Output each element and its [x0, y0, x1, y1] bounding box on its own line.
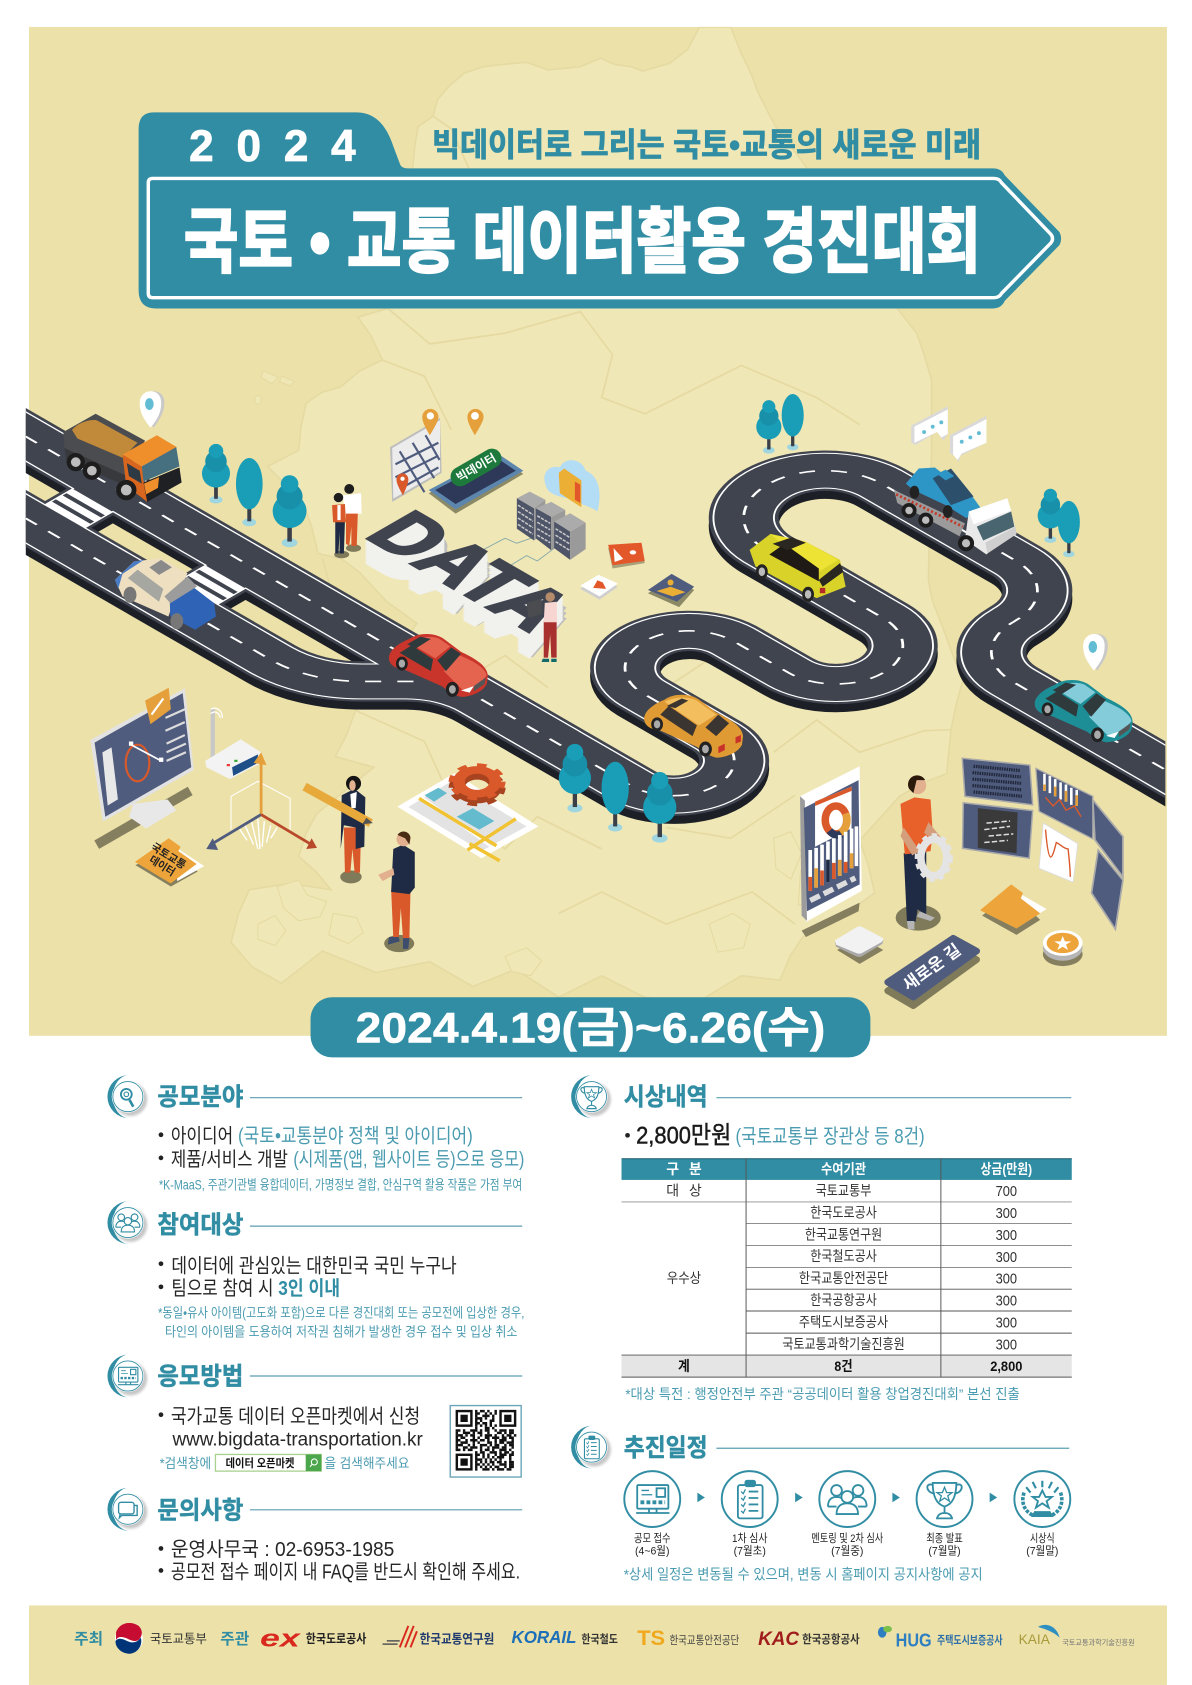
arrow 2: [795, 1493, 803, 1502]
data center connection lines: [480, 537, 554, 566]
icon: magnifier: [107, 1075, 147, 1118]
step 1: [624, 1471, 680, 1557]
prize table: [622, 1158, 1072, 1377]
logo: hug: HUG: [896, 1629, 932, 1650]
prize table: 300: [996, 1227, 1017, 1244]
prize table: 국토교통부: [816, 1183, 872, 1199]
section: awards: [571, 1075, 1072, 1402]
section: schedule: [571, 1426, 1070, 1584]
prize table: 700: [996, 1183, 1017, 1200]
bullet lines: 데이터에 관심있는 대한민국 국민 누구나: [171, 1255, 457, 1277]
step 3: [811, 1471, 884, 1557]
bullet lines: 팀으로 참여 시: [171, 1278, 273, 1300]
heading: 추진일정: [624, 1434, 708, 1462]
prize table: 국토교통과학기술진흥원: [782, 1336, 905, 1352]
trees: top middle group: [756, 394, 804, 454]
host label: 주최: [74, 1630, 103, 1648]
bullet lines: [159, 1539, 520, 1584]
prize table: 상금(만원): [981, 1161, 1032, 1177]
icon: trophy: [571, 1075, 611, 1118]
search hint: [160, 1454, 409, 1471]
flatbed truck with blue car: [894, 467, 1017, 555]
man talking: [378, 831, 415, 952]
prize table: 300: [996, 1314, 1017, 1331]
banner inner outline: [148, 178, 1053, 298]
organizer label: 주관: [220, 1630, 249, 1648]
bullet lines: 3인 이내: [278, 1278, 340, 1300]
prize headline: 2,800만원: [636, 1122, 731, 1149]
bullet lines: 제품/서비스 개발: [171, 1149, 288, 1171]
arrow 1: [697, 1493, 705, 1502]
prize table: 한국도로공사: [810, 1205, 877, 1221]
award note: *대상 특전 : 행정안전부 주관 “공공데이터 활용 창업경진대회” 본선 진출: [625, 1386, 1020, 1402]
step 3: 멘토링 및 2차 심사: [811, 1532, 884, 1545]
city map with gear: [397, 765, 538, 861]
beige and blue SUV: [115, 558, 216, 630]
logo: ts: 한국교통안전공단: [669, 1634, 739, 1647]
icon: monitor: [107, 1355, 147, 1398]
section: participants: [107, 1201, 524, 1339]
road network: [0, 397, 1192, 804]
trees: right group: [1038, 489, 1080, 557]
banner sign shape: [139, 112, 1061, 308]
arrow 4: [990, 1493, 997, 1502]
schedule note: *상세 일정은 변동될 수 있으며, 변동 시 홈페이지 공지사항에 공지: [624, 1567, 983, 1584]
phone with big data label: [429, 445, 523, 514]
media icon tile red: [608, 543, 645, 568]
bullet lines: 공모전 접수 페이지 내 FAQ를 반드시 확인해 주세요.: [171, 1562, 520, 1584]
logo: kac: KAC: [758, 1628, 800, 1650]
prize table: 300: [996, 1336, 1017, 1353]
search hint: 데이터 오픈마켓: [226, 1456, 294, 1470]
logo: kac: [758, 1628, 860, 1650]
subtitle: 빅데이터로 그리는 국토•교통의 새로운 미래: [432, 127, 981, 163]
logo: expressway: [260, 1626, 367, 1652]
wifi router: [205, 708, 261, 779]
trees: left group: [202, 444, 307, 547]
logo: hug: [878, 1626, 1003, 1650]
icon: clipboard: [571, 1426, 611, 1469]
search hint: 을 검색해주세요: [325, 1456, 409, 1471]
logo: korail: KORAIL: [511, 1627, 576, 1647]
note: *K-MaaS, 주관기관별 융합데이터, 가명정보 결합, 안심구역 활용 작품은 가점 부여: [159, 1178, 522, 1193]
logo: ministry emblem: [115, 1623, 143, 1654]
alert icon tile white: [580, 575, 618, 600]
ministry name: 국토교통부: [150, 1632, 207, 1646]
search hint: *검색창에: [160, 1456, 211, 1471]
logo: kac: 한국공항공사: [802, 1632, 860, 1646]
note: 타인의 아이템을 도용하여 저작권 침해가 발생한 경우 접수 및 입상 취소: [165, 1324, 517, 1339]
footer organizers band: [29, 1605, 1167, 1685]
folder with national transport data label: 데이터: [147, 853, 178, 879]
prize table: 300: [996, 1271, 1017, 1288]
logo: ts: TS: [637, 1626, 665, 1650]
arrow 3: [892, 1493, 900, 1502]
step 5: [1014, 1471, 1070, 1557]
logo: kaia: [1019, 1625, 1135, 1647]
icon: chat: [107, 1488, 147, 1531]
step 5: (7월말): [1026, 1543, 1059, 1557]
cloud with folder: [544, 460, 600, 512]
prize table: 한국교통안전공단: [799, 1270, 888, 1286]
note: [158, 1305, 524, 1339]
step 1: 공모 접수: [634, 1532, 671, 1545]
new road sign pill: [888, 938, 977, 1006]
orange car: [644, 695, 743, 758]
prize table: 구 분: [666, 1161, 702, 1177]
phone with big data label: 빅데이터: [454, 451, 499, 485]
location pin left: [140, 391, 164, 428]
date pill: [311, 997, 870, 1057]
monitor with design tool: [90, 688, 194, 845]
map background panel: [29, 27, 1167, 1036]
prize table: 한국공항공사: [810, 1292, 877, 1308]
logo: expressway: 한국도로공사: [306, 1631, 367, 1646]
3D axes chart: [206, 752, 317, 850]
logo: korail: 한국철도: [581, 1632, 618, 1646]
logo: hug: 주택도시보증공사: [937, 1634, 1003, 1647]
prize table: 300: [996, 1293, 1017, 1310]
main title: 국토 • 교통 데이터활용 경진대회: [184, 204, 981, 283]
folder with national transport data label: [135, 838, 204, 887]
prize table: 수여기관: [821, 1161, 866, 1177]
bullet lines: www.bigdata-transportation.kr: [171, 1428, 423, 1450]
new road sign pill: 새로운 길: [899, 940, 964, 995]
heading: 참여대상: [157, 1211, 244, 1239]
logo: koti: 한국교통연구원: [420, 1632, 494, 1647]
yellow van: [750, 534, 846, 602]
section: contest field: [107, 1075, 524, 1193]
step 4: (7월말): [928, 1543, 961, 1557]
prize headline: (국토교통부 장관상 등 8건): [736, 1126, 925, 1148]
data panels: [962, 758, 1123, 929]
location pin right: [1083, 634, 1108, 671]
prize table: 우수상: [667, 1270, 701, 1286]
step 1: (4~6월): [635, 1544, 670, 1557]
title banner: [139, 112, 1061, 308]
man holding gear: [896, 775, 951, 931]
bullet lines: [159, 1125, 524, 1171]
bullet lines: (국토•교통분야 정책 및 아이디어): [238, 1125, 473, 1147]
prize table: 주택도시보증공사: [799, 1314, 888, 1330]
prize table: 8건: [834, 1358, 853, 1374]
step 3: (7월중): [831, 1544, 864, 1557]
heading: 시상내역: [624, 1083, 708, 1111]
logo: kaia: 국토교통과학기술진흥원: [1062, 1637, 1135, 1647]
step 2: [722, 1471, 778, 1557]
red car: [389, 634, 488, 697]
icon: people: [107, 1201, 147, 1244]
prize table: 300: [996, 1249, 1017, 1266]
QR code: [450, 1406, 521, 1477]
bullet lines: (시제품(앱, 웹사이트 등)으로 응모): [293, 1149, 524, 1171]
prize table: 한국철도공사: [810, 1248, 877, 1264]
step 4: [917, 1471, 972, 1557]
heading: 문의사항: [157, 1496, 244, 1524]
logo: kaia: KAIA: [1019, 1631, 1051, 1647]
woman holding pencil: [305, 776, 373, 883]
server racks: [517, 492, 586, 560]
dump truck: [63, 414, 182, 502]
logo: ts: [637, 1626, 739, 1650]
prize table: 300: [996, 1205, 1017, 1222]
bullet lines: 국가교통 데이터 오픈마켓에서 신청: [171, 1406, 420, 1428]
note: *동일•유사 아이템(고도화 포함)으로 다른 경진대회 또는 공모전에 입상한 경우,: [158, 1305, 524, 1320]
step 2: (7월초): [734, 1544, 766, 1557]
prize table: 2,800: [990, 1358, 1023, 1374]
folder with national transport data label: 국토교통: [149, 841, 188, 872]
bullet lines: [159, 1406, 423, 1450]
prize table: 계: [678, 1358, 690, 1374]
heading: 응모방법: [157, 1363, 243, 1391]
logo: korail: [511, 1627, 618, 1647]
orange folder: [980, 884, 1047, 935]
DATA 3D letters: DATA: [348, 500, 593, 642]
trees: bottom group: [559, 744, 676, 843]
section: how to apply: [107, 1355, 522, 1477]
star coin: [1043, 930, 1083, 966]
couple looking at map: [332, 484, 362, 558]
prize headline: [625, 1122, 925, 1149]
heading: 공모분야: [157, 1083, 244, 1111]
section: contact: [107, 1488, 522, 1584]
speech bubbles: [911, 406, 986, 462]
bullet lines: 운영사무국 : 02-6953-1985: [171, 1539, 394, 1561]
image icon tile blue: [648, 574, 694, 607]
step 2: 1차 심사: [732, 1532, 768, 1545]
logo: expressway: ex: [260, 1626, 301, 1652]
teal car: [1035, 680, 1133, 742]
step 5: 시상식: [1030, 1532, 1055, 1545]
phone with chart dashboard: [800, 766, 862, 937]
date pill: 2024.4.19(금)~6.26(수): [356, 1004, 825, 1052]
prize table: 대 상: [666, 1183, 702, 1199]
bullet lines: [159, 1255, 457, 1300]
bullet lines: 아이디어: [171, 1125, 233, 1147]
step 4: 최종 발표: [926, 1532, 963, 1545]
map card with pins: [390, 409, 484, 502]
prize table: 한국교통연구원: [805, 1226, 882, 1242]
year: 2 0 2 4: [189, 122, 356, 171]
person with laptop: [527, 592, 557, 662]
logo: koti: [383, 1626, 494, 1647]
white square tile: [835, 926, 883, 964]
